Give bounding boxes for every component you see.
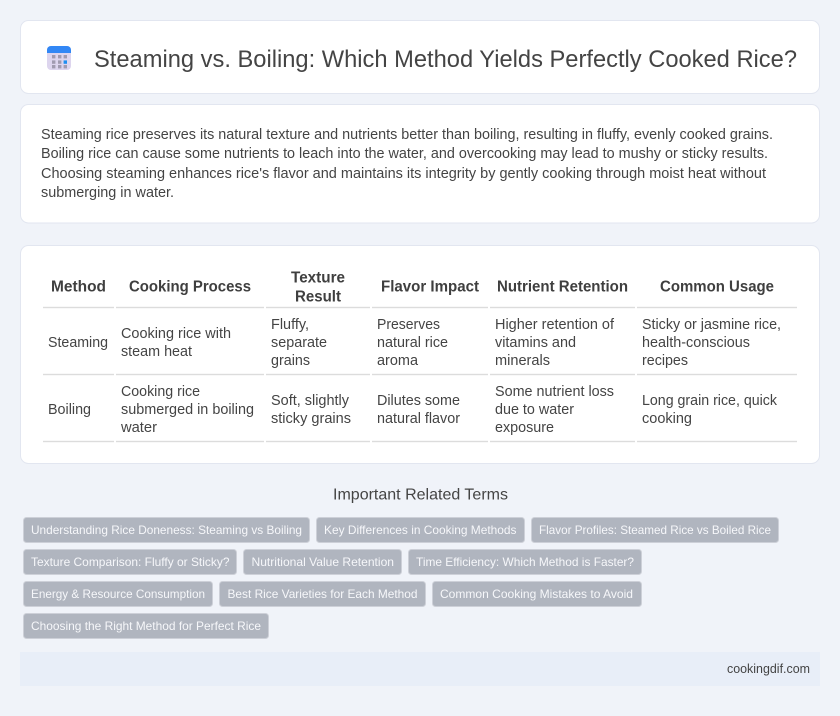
table row: boiling: submerged in boiling	[121, 402, 254, 418]
icon: calendar	[47, 46, 71, 70]
table row: boiling	[48, 384, 778, 436]
table row: steaming: Cooking rice with	[121, 326, 231, 342]
panel: related term tags: Texture Comparison: Fluffy or Sticky?	[31, 555, 230, 569]
panel: comparison table	[20, 246, 820, 464]
panel: related term tags: Time Efficiency: Which Method is Faster?	[416, 555, 634, 569]
table row: steaming	[48, 317, 781, 369]
table row: steaming: Fluffy,	[271, 317, 309, 333]
table header row: Cooking Process	[129, 278, 251, 296]
table header row: Texture	[291, 270, 345, 286]
panel: related term tags	[24, 518, 778, 638]
panel: related term tags: Common Cooking Mistakes to Avoid	[440, 587, 633, 601]
panel: header	[20, 20, 820, 94]
table row: boiling: exposure	[495, 420, 554, 436]
panel: related term tags: Key Differences in Cooking Methods	[324, 523, 516, 537]
panel: related term tags: Best Rice Varieties for Each Method	[228, 587, 418, 601]
table row: steaming: natural rice	[377, 335, 448, 351]
panel: related term tags: Energy & Resource Consumption	[31, 587, 205, 601]
table row: boiling: cooking	[642, 411, 692, 427]
table row: boiling: Soft, slightly	[271, 393, 350, 409]
text block: intro: Boiling rice can cause some nutrients to leach into the water, and overcooking may lead to mushy or sticky results.	[41, 146, 768, 162]
panel: related term tags: Flavor Profiles: Steamed Rice vs Boiled Rice	[539, 523, 771, 537]
table header row	[51, 270, 774, 306]
table row: steaming: health-conscious	[642, 335, 750, 351]
table row: boiling: water	[120, 420, 157, 436]
table row: boiling: natural flavor	[377, 411, 460, 427]
title: Steaming vs. Boiling: Which Method Yields Perfectly Cooked Rice?	[94, 46, 797, 73]
table row: steaming: steam heat	[121, 344, 192, 360]
panel: related term tags: Nutritional Value Retention	[252, 555, 394, 569]
table row: boiling: sticky grains	[271, 411, 351, 427]
table header row: Flavor Impact	[381, 278, 480, 296]
table row: steaming: aroma	[377, 353, 418, 369]
table row: steaming: grains	[271, 353, 310, 369]
text block: intro: Choosing steaming enhances rice's flavor and maintains its integrity by gently cooking through moist heat without	[41, 166, 766, 182]
text block: intro: submerging in water.	[41, 185, 174, 201]
table row: steaming: Sticky or jasmine rice,	[642, 317, 781, 333]
table row: steaming: separate	[271, 335, 327, 351]
table row: steaming: Preserves	[377, 317, 440, 333]
table row: steaming: Higher retention of	[495, 317, 615, 333]
table row: steaming: minerals	[495, 353, 550, 369]
table header row: Common Usage	[660, 278, 774, 296]
panel: related term tags: Understanding Rice Doneness: Steaming vs Boiling	[31, 523, 302, 537]
table row: boiling: Dilutes some	[377, 393, 460, 409]
panel: intro paragraph	[20, 104, 820, 223]
text block: intro: Steaming rice preserves its natural texture and nutrients better than boiling, resulting in fluffy, evenly cooked grains.	[41, 127, 773, 143]
table header row: Method	[51, 278, 106, 296]
panel: related term tags: Choosing the Right Method for Perfect Rice	[31, 619, 261, 633]
text block: intro	[41, 127, 773, 201]
table header row: Nutrient Retention	[497, 278, 628, 296]
table row: steaming: vitamins and	[495, 335, 576, 351]
table header row: Result	[295, 288, 342, 306]
footer	[20, 652, 820, 686]
table row: boiling: due to water	[495, 402, 574, 418]
table row: boiling: Cooking rice	[121, 384, 200, 400]
table row: boiling: Some nutrient loss	[495, 384, 614, 400]
table row: boiling: Long grain rice, quick	[642, 393, 778, 409]
table row: steaming: Steaming	[48, 335, 108, 351]
table row: boiling: Boiling	[48, 402, 91, 418]
table row: steaming: recipes	[642, 353, 688, 369]
heading: related terms: Important Related Terms	[333, 486, 508, 504]
footer: cookingdif.com	[727, 661, 810, 676]
